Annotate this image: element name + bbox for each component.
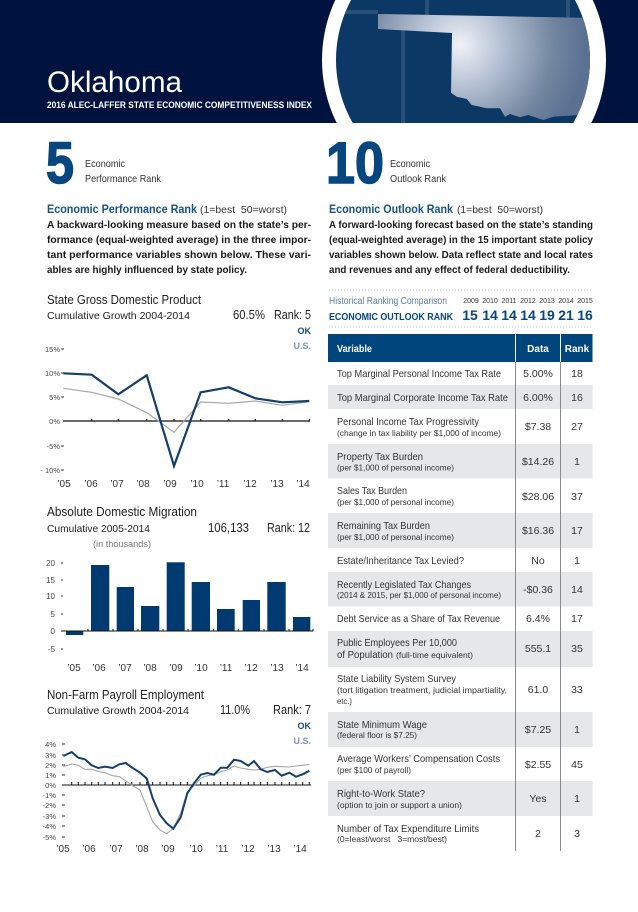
row: personal income tax rate: Top Marginal Personal Income Tax Rate xyxy=(337,368,501,380)
row: property tax burden xyxy=(337,451,580,472)
historical ranking comparison: 14 xyxy=(501,307,517,323)
row: workers compensation xyxy=(337,753,583,775)
row: public employees: (full-time equivalent) xyxy=(396,650,473,660)
description paragraph: ables are highly influenced by state policy. xyxy=(47,264,247,276)
row: minimum wage: State Minimum Wage xyxy=(337,719,427,731)
row: estate tax: Estate/Inheritance Tax Levied? xyxy=(337,555,464,567)
rank label: Economic xyxy=(390,159,430,170)
row: property tax burden: Property Tax Burden xyxy=(337,451,423,463)
heading: Economic Outlook Rank xyxy=(329,202,453,216)
bar chart: migration: -5 xyxy=(48,645,56,654)
line chart: GDP growth: ’06 xyxy=(84,479,98,490)
line chart: GDP growth: ’07 xyxy=(110,479,124,490)
description paragraph: A backward-looking measure based on the state’s per- xyxy=(47,219,311,231)
chart heading: Cumulative Growth 2004-2014 xyxy=(47,310,190,322)
historical ranking comparison: ECONOMIC OUTLOOK RANK xyxy=(329,312,454,323)
bar chart: migration: ’09 xyxy=(169,663,183,674)
row: liability survey: 61.0 xyxy=(528,684,548,696)
line chart: GDP growth: 15% xyxy=(45,345,60,354)
table header: Rank xyxy=(565,344,590,355)
row: debt service: 17 xyxy=(571,613,583,625)
line chart: employment growth: ’12 xyxy=(241,844,255,855)
chart heading: Rank: 12 xyxy=(267,520,310,535)
row: public employees: 555.1 xyxy=(525,643,551,655)
row: legislated tax changes xyxy=(337,579,583,600)
description paragraph: (equal-weighted average) in the 15 important state policy xyxy=(329,234,593,246)
line chart: employment growth: ’14 xyxy=(293,844,307,855)
row: remaining tax burden: $16.36 xyxy=(522,525,554,537)
bar chart: migration: ’05 xyxy=(67,663,81,674)
row: corporate income tax rate: 16 xyxy=(571,392,583,404)
line chart: GDP growth: ’09 xyxy=(163,479,177,490)
panel: state GDP chart xyxy=(40,292,312,490)
row: corporate income tax rate: 6.00% xyxy=(523,392,553,404)
row: public employees: of Population xyxy=(337,649,393,661)
line chart: employment growth: ’09 xyxy=(161,844,175,855)
historical ranking comparison: 14 xyxy=(482,307,498,323)
line chart: GDP growth: ’14 xyxy=(296,479,310,490)
chart heading: Absolute Domestic Migration xyxy=(47,504,197,519)
row: sales tax burden: (per $1,000 of personal income) xyxy=(337,497,454,507)
rank label xyxy=(85,159,162,185)
row: sales tax burden: Sales Tax Burden xyxy=(337,485,407,497)
chart heading: State Gross Domestic Product xyxy=(47,292,201,307)
chart heading: Non-Farm Payroll Employment xyxy=(47,687,204,702)
row: tax progressivity: (change in tax liability per $1,000 of income) xyxy=(337,428,501,438)
row: right to work: (option to join or support a union) xyxy=(337,800,462,810)
description paragraph: and revenues and any effect of federal deductibility. xyxy=(329,264,570,276)
line chart: employment growth: -4% xyxy=(43,822,56,831)
title: Oklahoma xyxy=(47,66,182,99)
historical ranking comparison: 2015 xyxy=(577,298,593,305)
row: sales tax burden: $28.06 xyxy=(522,491,554,503)
historical ranking comparison: 14 xyxy=(520,307,536,323)
row: tax expenditure limits: (0=least/worst 3=most/best) xyxy=(337,834,447,844)
row: personal income tax rate: 5.00% xyxy=(523,368,553,380)
row: debt service: 6.4% xyxy=(526,613,550,625)
line chart: GDP growth: ’12 xyxy=(243,479,257,490)
legend: U.S. xyxy=(293,341,311,351)
row: liability survey: State Liability System Survey xyxy=(337,673,457,685)
historical ranking comparison: 2011 xyxy=(501,298,517,305)
line chart: employment growth: ’13 xyxy=(267,844,281,855)
description paragraph: tant performance variables shown below. These vari- xyxy=(47,249,311,261)
line chart: GDP growth: -5% xyxy=(47,442,60,451)
line chart: GDP growth: ’08 xyxy=(136,479,150,490)
line chart: GDP growth: ’11 xyxy=(217,479,230,490)
historical ranking comparison: 2014 xyxy=(558,298,574,305)
rank label: Outlook Rank xyxy=(390,174,447,185)
line chart: employment growth: ’06 xyxy=(82,844,96,855)
bar chart: migration: ’06 xyxy=(92,663,106,674)
row: liability survey xyxy=(337,673,583,706)
rank label: Performance Rank xyxy=(85,174,162,185)
chart heading xyxy=(47,292,311,322)
legend xyxy=(293,326,312,351)
bar chart: migration: ’12 xyxy=(244,663,258,674)
row: liability survey: etc.) xyxy=(337,696,352,706)
row: sales tax burden: 37 xyxy=(571,491,583,503)
row: property tax burden: (per $1,000 of personal income) xyxy=(337,462,454,472)
line chart: GDP growth: 0% xyxy=(49,417,60,426)
row: property tax burden: $14.26 xyxy=(522,456,554,468)
line chart: GDP growth: 5% xyxy=(49,393,60,402)
historical ranking comparison: 19 xyxy=(539,307,555,323)
row: minimum wage: 1 xyxy=(574,724,580,736)
heading: Economic Performance Rank xyxy=(47,202,197,216)
description paragraph xyxy=(47,219,311,276)
row: legislated tax changes: -$0.36 xyxy=(523,584,553,596)
table header xyxy=(328,334,592,362)
description paragraph: variables shown below. Data reflect state and local rates xyxy=(329,249,593,261)
row: personal income tax rate: 18 xyxy=(571,368,583,380)
bar chart: migration: 0 xyxy=(51,627,56,636)
bar chart: migration: 15 xyxy=(46,576,56,585)
chart heading: 11.0% xyxy=(220,702,250,717)
row: right to work xyxy=(337,788,580,810)
row: public employees: Public Employees Per 10,000 xyxy=(337,637,457,649)
row: property tax burden: 1 xyxy=(574,456,580,468)
historical ranking comparison: 2012 xyxy=(520,298,536,305)
row: estate tax: 1 xyxy=(574,555,580,567)
description paragraph: A forward-looking forecast based on the state’s standing xyxy=(329,219,593,231)
table header: Data xyxy=(527,344,549,355)
row: workers compensation: 45 xyxy=(571,759,583,771)
row: workers compensation: (per $100 of payroll) xyxy=(337,765,411,775)
big rank number 5: 5 xyxy=(46,131,74,196)
chart heading: Rank: 5 xyxy=(274,307,311,322)
chart heading: 106,133 xyxy=(208,520,249,535)
row: sales tax burden xyxy=(337,485,583,507)
panel: payroll employment chart xyxy=(43,687,312,855)
legend: OK xyxy=(298,326,312,336)
header banner xyxy=(0,0,638,123)
icon: Oklahoma state map in circle xyxy=(322,0,606,123)
row: remaining tax burden: Remaining Tax Burden xyxy=(337,520,430,532)
row: tax expenditure limits: 3 xyxy=(574,828,580,840)
chart heading xyxy=(47,504,310,549)
row: legislated tax changes: Recently Legislated Tax Changes xyxy=(337,579,471,591)
line chart: employment growth: ’10 xyxy=(189,844,203,855)
bar chart: migration: ’10 xyxy=(194,663,208,674)
row: public employees xyxy=(337,637,583,661)
line chart: GDP growth: 10% xyxy=(45,369,60,378)
bar chart: migration: ’14 xyxy=(295,663,309,674)
row: tax progressivity: $7.38 xyxy=(525,421,551,433)
row: debt service: Debt Service as a Share of Tax Revenue xyxy=(337,613,500,625)
bar chart: migration: 10 xyxy=(46,592,56,601)
line chart: employment growth: -2% xyxy=(43,801,56,810)
row: tax progressivity xyxy=(337,416,583,438)
row: remaining tax burden: 17 xyxy=(571,525,583,537)
row: public employees: 35 xyxy=(571,643,583,655)
row: workers compensation: $2.55 xyxy=(525,759,551,771)
line chart: employment growth: 1% xyxy=(45,771,56,780)
line chart: employment growth: 3% xyxy=(45,751,56,760)
description paragraph: formance (equal-weighted average) in the three impor- xyxy=(47,234,311,246)
row: estate tax xyxy=(337,555,580,567)
line chart: employment growth: -5% xyxy=(43,833,56,842)
chart heading: 60.5% xyxy=(233,307,265,322)
description paragraph xyxy=(329,219,593,276)
bar chart: migration: ’13 xyxy=(270,663,284,674)
bar chart: migration: ’08 xyxy=(143,663,157,674)
row: liability survey: 33 xyxy=(571,684,583,696)
historical ranking comparison: 2010 xyxy=(482,298,498,305)
line chart: GDP growth: ’10 xyxy=(190,479,204,490)
rank label: Economic xyxy=(85,159,125,170)
subtitle: 2016 ALEC-LAFFER STATE ECONOMIC COMPETITIVENESS INDEX xyxy=(47,100,313,111)
legend: U.S. xyxy=(293,736,311,746)
bar chart: migration: ’07 xyxy=(118,663,132,674)
chart heading: (in thousands) xyxy=(93,539,151,549)
chart heading xyxy=(47,687,311,717)
bar chart: migration: 20 xyxy=(46,559,56,568)
row: right to work: Yes xyxy=(529,793,547,805)
bar chart: migration xyxy=(46,559,313,674)
table header: Variable xyxy=(337,344,372,355)
row: legislated tax changes: 14 xyxy=(571,584,583,596)
row: legislated tax changes: (2014 & 2015, per $1,000 of personal income) xyxy=(337,590,501,600)
line chart: employment growth xyxy=(43,740,311,855)
row: corporate income tax rate: Top Marginal Corporate Income Tax Rate xyxy=(337,392,508,404)
row: tax expenditure limits xyxy=(337,823,580,844)
heading: (1=best 50=worst) xyxy=(457,205,543,216)
row: minimum wage: $7.25 xyxy=(525,724,551,736)
line chart: employment growth: ’07 xyxy=(109,844,123,855)
bar chart: migration: ’11 xyxy=(220,663,233,674)
row: tax progressivity: Personal Income Tax Progressivity xyxy=(337,416,480,428)
row: tax progressivity: 27 xyxy=(571,421,583,433)
panel: domestic migration chart xyxy=(46,504,313,674)
historical ranking comparison: 15 xyxy=(462,307,478,323)
row: estate tax: No xyxy=(531,555,545,567)
line chart: employment growth: ’08 xyxy=(135,844,149,855)
row: right to work: 1 xyxy=(574,793,580,805)
line chart: GDP growth: - 10% xyxy=(40,466,60,475)
row: liability survey: (tort litigation treatment, judicial impartiality, xyxy=(337,685,507,695)
big rank number 10: 10 xyxy=(326,131,384,196)
legend: OK xyxy=(298,721,312,731)
row: minimum wage: (federal floor is $7.25) xyxy=(337,730,417,740)
line chart: employment growth: ’05 xyxy=(56,844,70,855)
line chart: employment growth: 4% xyxy=(45,740,56,749)
historical ranking comparison: 21 xyxy=(558,307,574,323)
table: policy variables xyxy=(328,334,592,851)
chart heading: Cumulative Growth 2004-2014 xyxy=(47,705,189,717)
row: remaining tax burden xyxy=(337,520,583,542)
bar chart: migration: 5 xyxy=(51,610,56,619)
panel: economic performance xyxy=(46,131,311,276)
row: workers compensation: Average Workers’ Compensation Costs xyxy=(337,753,500,765)
historical ranking comparison: 2013 xyxy=(539,298,555,305)
chart heading: Rank: 7 xyxy=(273,702,311,717)
row: tax expenditure limits: 2 xyxy=(535,828,541,840)
rank label xyxy=(390,159,447,185)
row: minimum wage xyxy=(337,719,580,740)
row: right to work: Right-to-Work State? xyxy=(337,788,425,800)
row: remaining tax burden: (per $1,000 of personal income) xyxy=(337,532,454,542)
row: tax expenditure limits: Number of Tax Expenditure Limits xyxy=(337,823,479,835)
line chart: employment growth: 0% xyxy=(45,781,56,790)
line chart: GDP growth xyxy=(40,345,310,490)
panel: economic outlook xyxy=(326,131,593,327)
historical ranking comparison: 2009 xyxy=(463,298,479,305)
line chart: GDP growth: ’13 xyxy=(270,479,284,490)
historical ranking comparison: Historical Ranking Comparison xyxy=(329,296,447,307)
line chart: GDP growth: ’05 xyxy=(57,479,71,490)
line chart: employment growth: -1% xyxy=(43,791,56,800)
historical ranking comparison xyxy=(329,296,593,323)
heading: (1=best 50=worst) xyxy=(200,205,287,216)
line chart: employment growth: ’11 xyxy=(216,844,229,855)
line chart: employment growth: 2% xyxy=(45,761,56,770)
heading xyxy=(47,202,287,216)
chart heading: Cumulative 2005-2014 xyxy=(47,523,150,535)
heading xyxy=(329,202,543,216)
line chart: employment growth: -3% xyxy=(43,812,56,821)
legend xyxy=(293,721,312,746)
historical ranking comparison: 16 xyxy=(577,307,593,323)
